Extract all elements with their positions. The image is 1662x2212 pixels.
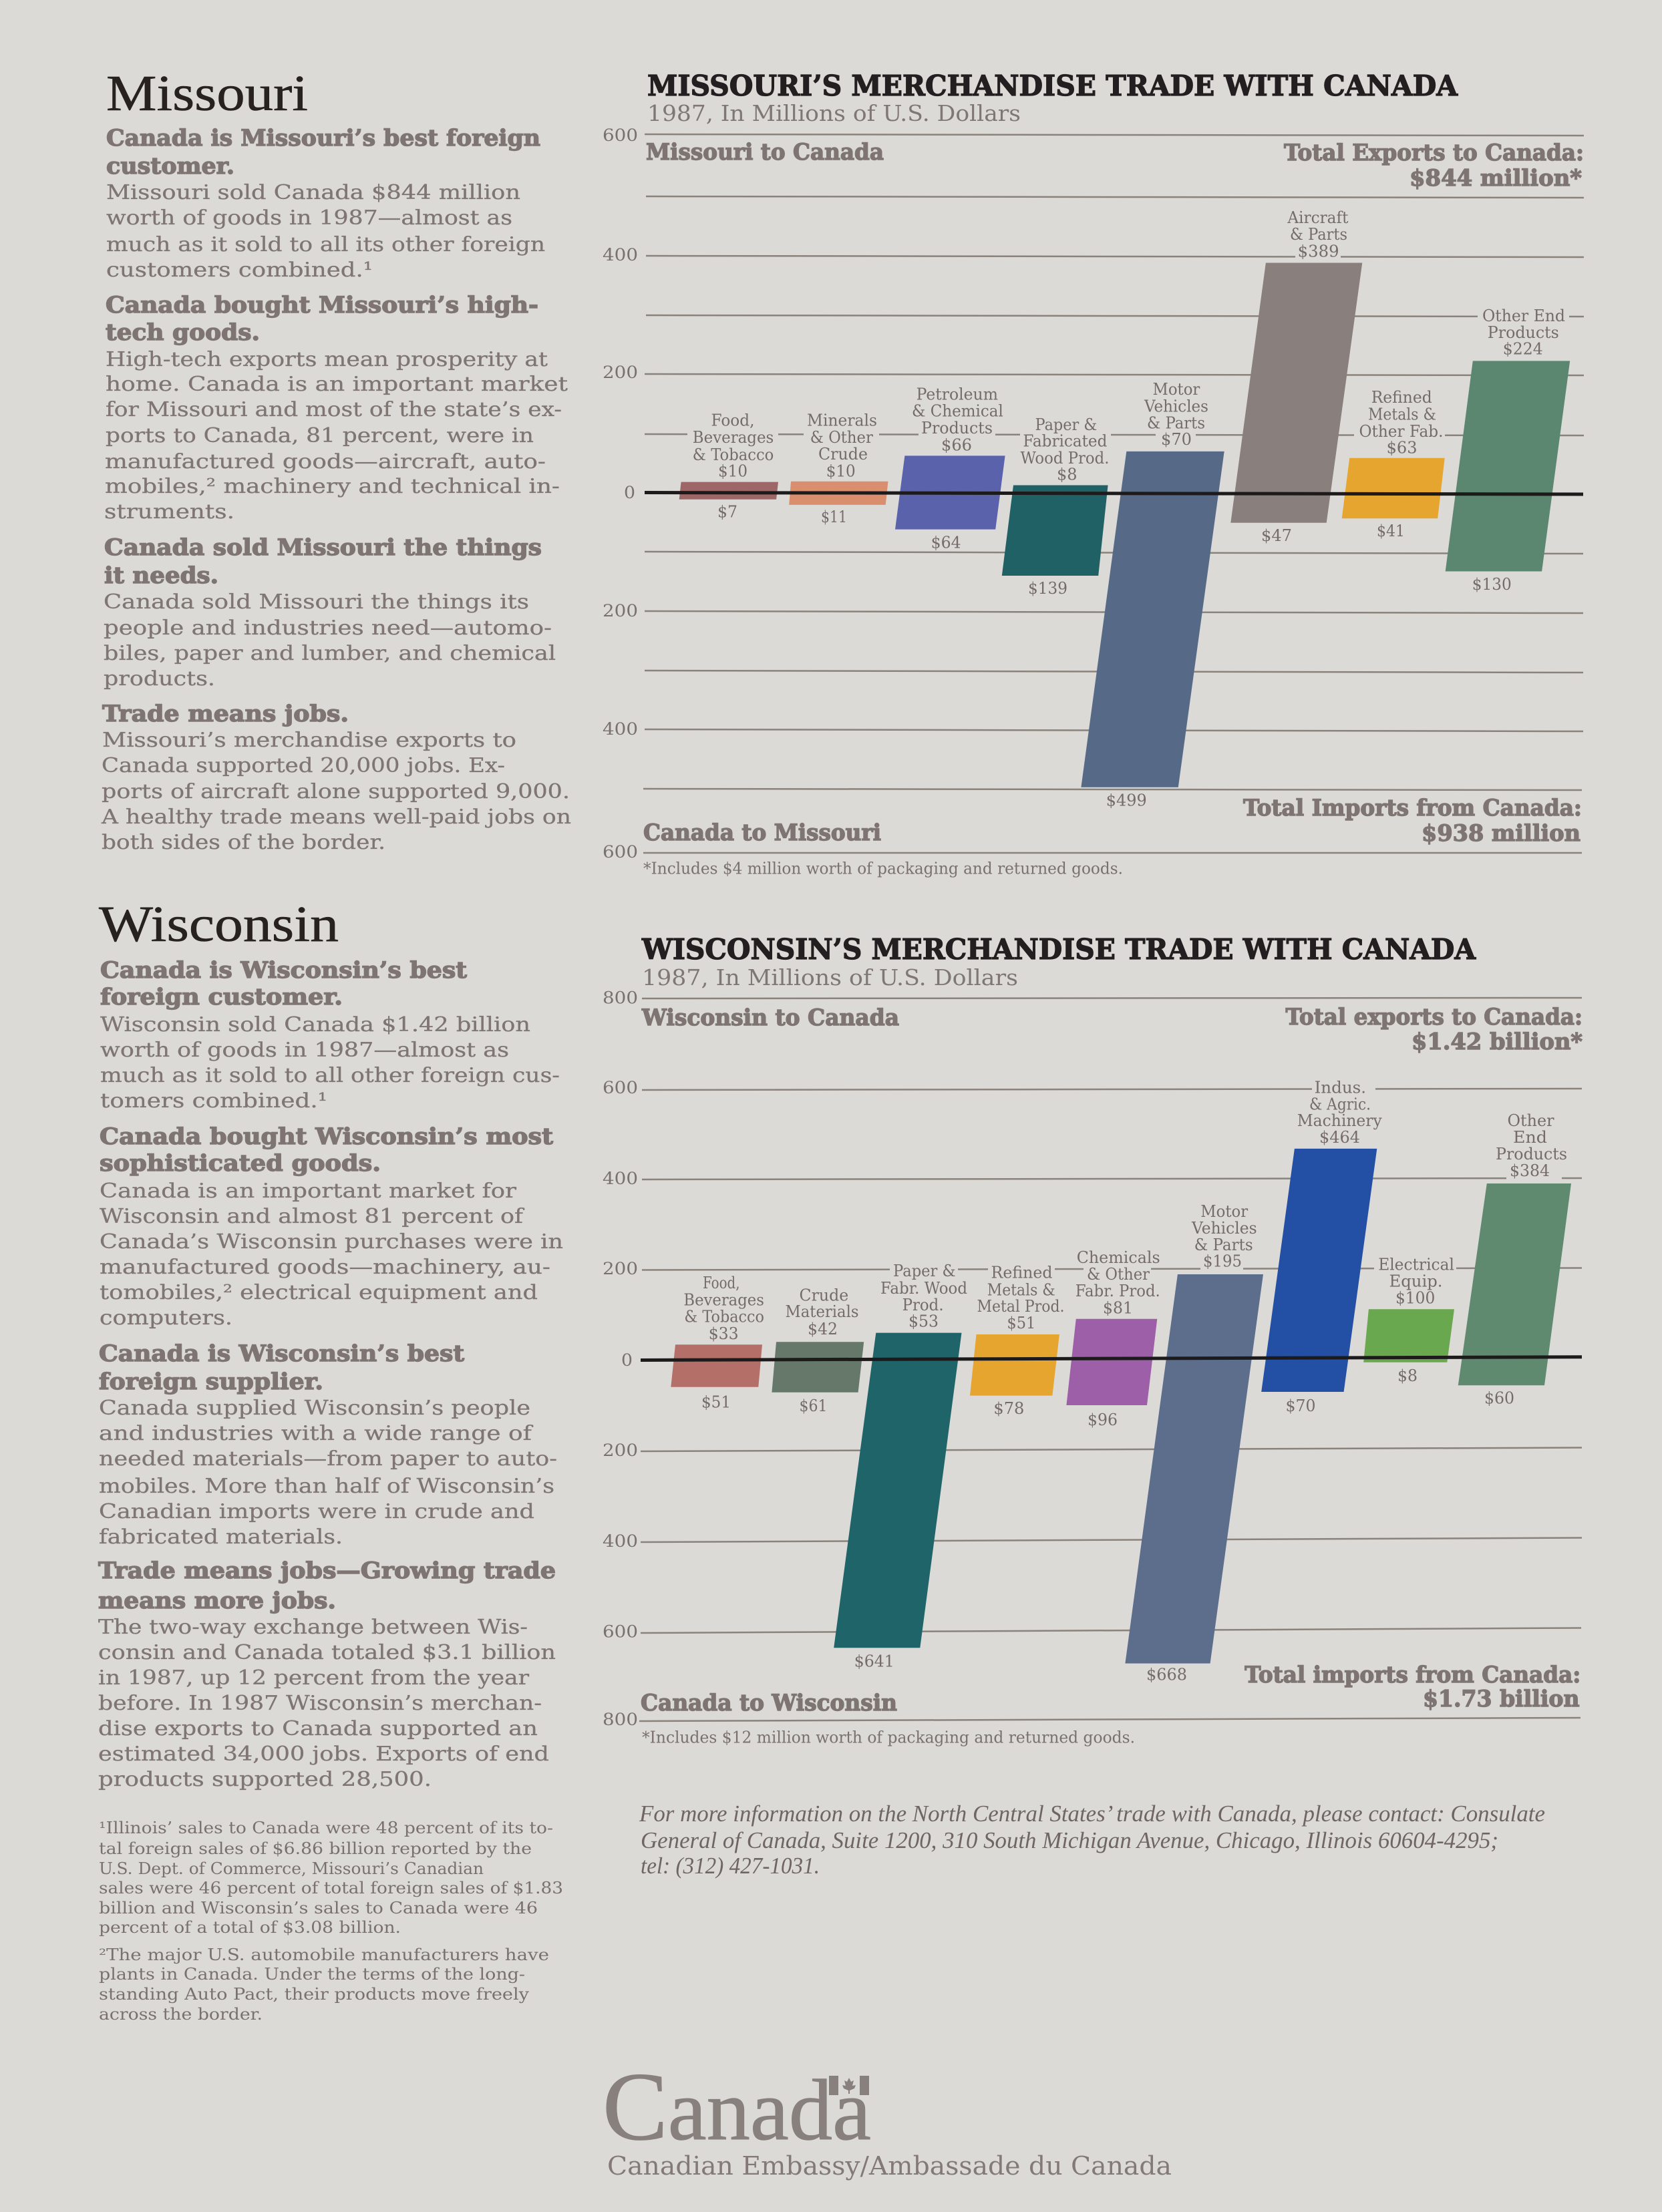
text block: best foreign customer: customer. — [106, 153, 234, 180]
import values: $96 — [1088, 1411, 1118, 1429]
label: food: Beverages — [683, 1291, 764, 1310]
label: paper: Prod. — [902, 1296, 944, 1314]
text block: growing trade means more jobs: consin and Canada totaled $3.1 billion — [98, 1641, 556, 1664]
totals and direction headings: Total Imports from Canada: — [1243, 795, 1582, 821]
label: paper: Fabr. Wood — [880, 1279, 967, 1298]
label: aircraft: $389 — [1298, 242, 1339, 260]
label: paper: $53 — [908, 1312, 939, 1331]
label: minerals: & Other — [810, 428, 873, 447]
bar: minerals and other crude — [789, 482, 888, 505]
label: electrical equipment: $100 — [1395, 1288, 1435, 1307]
totals and direction headings: Total exports to Canada: — [1285, 1004, 1583, 1031]
totals and direction headings: $1.73 billion — [1423, 1686, 1579, 1712]
text block: trade means jobs: both sides of the border. — [102, 831, 385, 854]
text block: footnotes: ¹Illinois’ sales to Canada were 48 percent of its to- — [99, 1819, 553, 1837]
totals and direction headings: $844 million* — [1409, 165, 1582, 192]
totals and direction headings — [641, 1004, 1583, 1716]
label: refined metals: Metal Prod. — [977, 1297, 1065, 1316]
text block: best foreign supplier: mobiles. More than half of Wisconsin’s — [99, 1475, 554, 1498]
label: petroleum: Products — [921, 419, 993, 437]
text block: growing trade means more jobs: in 1987, up 12 percent from the year — [98, 1666, 530, 1690]
text block: best foreign customer: tomers combined.¹ — [100, 1089, 327, 1113]
axis labels: 0 — [621, 1350, 633, 1370]
label: petroleum: $66 — [941, 435, 972, 454]
chart title: MISSOURI’S MERCHANDISE TRADE WITH CANADA — [647, 69, 1458, 102]
text block: best foreign customer: Canada is Missouri’s best foreign — [106, 125, 540, 152]
text block: things it needs: people and industries need—automo- — [104, 616, 552, 640]
text block: trade means jobs: Trade means jobs. — [102, 701, 349, 727]
text block: footnotes: percent of a total of $3.08 billion. — [99, 1918, 401, 1937]
label: chemicals — [1075, 1248, 1160, 1318]
text block: best foreign customer: customers combined.¹ — [106, 258, 373, 282]
panel: Wisconsin text column — [98, 896, 563, 2024]
label: electrical equipment: Equip. — [1389, 1272, 1443, 1290]
text block: things it needs: Canada sold Missouri the things — [104, 534, 542, 561]
label: chemicals: $81 — [1103, 1299, 1133, 1318]
text block: best foreign customer: much as it sold to all its other foreign — [106, 233, 545, 256]
label: food: Beverages — [693, 428, 774, 447]
text block: best foreign customer — [100, 957, 560, 1113]
axis labels: 800 — [603, 1710, 638, 1729]
label: paper: Wood Prod. — [1021, 449, 1109, 468]
axis labels: 400 — [603, 719, 638, 739]
heading: Missouri: Missouri — [106, 65, 308, 122]
text block: high-tech goods — [104, 292, 568, 524]
label: other end products: Products — [1488, 323, 1559, 342]
import values: $61 — [799, 1397, 827, 1415]
axis labels: 800 — [603, 988, 638, 1008]
import values: $139 — [1028, 579, 1067, 598]
label: other end products: Other End — [1482, 307, 1565, 325]
bar: food, beverages and tobacco — [671, 1344, 762, 1387]
bar: crude materials — [772, 1342, 864, 1393]
import values: $130 — [1472, 575, 1512, 594]
label: chemicals: & Other — [1087, 1265, 1150, 1284]
axis labels: 400 — [603, 245, 638, 264]
totals and direction headings: $938 million — [1422, 820, 1581, 847]
bar: electrical equipment — [1363, 1309, 1454, 1362]
bar: food, beverages and tobacco — [679, 482, 778, 500]
label: refined metals: $63 — [1387, 438, 1418, 457]
axis labels — [603, 988, 638, 1729]
import values: $51 — [701, 1393, 731, 1411]
text block: footnotes — [99, 1819, 563, 2024]
panel: Missouri trade chart — [603, 69, 1584, 878]
label: electrical equipment — [1378, 1256, 1454, 1307]
label: food: & Tobacco — [693, 445, 774, 464]
text block: high-tech goods: manufactured goods—aircraft, auto- — [105, 450, 546, 474]
heading: Wisconsin: Wisconsin — [99, 896, 339, 952]
text block: best foreign supplier: Canada is Wisconsin’s best — [99, 1340, 464, 1367]
text block: most sophisticated goods: Canada is an important market for — [100, 1179, 517, 1203]
text block: high-tech goods: tech goods. — [106, 319, 260, 346]
import values — [701, 1366, 1514, 1684]
text block: high-tech goods: High-tech exports mean prosperity at — [106, 348, 548, 371]
footnote: *Includes $12 million worth of packaging and returned goods. — [642, 1728, 1135, 1747]
label: petroleum: Petroleum — [917, 385, 998, 403]
text block: high-tech goods: struments. — [104, 500, 234, 524]
label: minerals — [807, 411, 877, 481]
bars — [671, 1149, 1571, 1664]
bar: petroleum and chemical products — [895, 455, 1005, 530]
text block: best foreign supplier: needed materials—from paper to auto- — [99, 1447, 557, 1471]
bar: motor vehicles and parts — [1125, 1274, 1263, 1664]
text block: footnotes: U.S. Dept. of Commerce, Missouri’s Canadian — [99, 1859, 484, 1878]
axis labels: 600 — [603, 1078, 638, 1097]
label: food: Food, — [711, 411, 755, 430]
axis labels: 0 — [624, 483, 635, 502]
label: machinery: $464 — [1319, 1128, 1360, 1147]
text block: most sophisticated goods: manufactured goods—machinery, au- — [100, 1256, 550, 1279]
totals and direction headings: Total Exports to Canada: — [1284, 140, 1584, 166]
text block: trade means jobs: Missouri’s merchandise exports to — [102, 729, 516, 752]
bar: other end products — [1446, 361, 1570, 572]
text block: most sophisticated goods: tomobiles,² electrical equipment and — [100, 1281, 538, 1304]
import values — [717, 503, 1512, 809]
text block: trade means jobs: ports of aircraft alone supported 9,000. — [102, 780, 570, 803]
bar: motor vehicles and parts — [1081, 451, 1224, 787]
text block: best foreign customer: foreign customer. — [100, 984, 343, 1010]
text block: best foreign supplier — [99, 1340, 557, 1549]
contact information: tel: (312) 427-1031. — [641, 1853, 820, 1879]
label: food: & Tobacco — [684, 1308, 764, 1326]
label: paper: $8 — [1057, 465, 1077, 484]
text block: best foreign supplier: and industries with a wide range of — [99, 1422, 533, 1445]
label: paper — [880, 1262, 967, 1331]
category labels — [683, 1078, 1567, 1343]
axis labels: 600 — [603, 126, 638, 145]
text block: best foreign supplier: Canadian imports were in crude and — [99, 1500, 534, 1523]
label: other end products: $384 — [1510, 1161, 1550, 1180]
import values: $499 — [1106, 791, 1147, 809]
totals and direction headings: Missouri to Canada — [646, 139, 884, 166]
zero line — [645, 493, 1583, 494]
label: food — [693, 411, 774, 481]
contact information — [639, 1801, 1545, 1879]
label: minerals: Crude — [818, 445, 868, 464]
text block: things it needs: it needs. — [104, 562, 218, 589]
import values: $60 — [1484, 1389, 1514, 1408]
bar: refined metals — [970, 1334, 1059, 1396]
import values: $11 — [821, 508, 847, 526]
import values: $41 — [1377, 522, 1405, 540]
text block: trade means jobs — [101, 701, 571, 854]
chart subtitle: 1987, In Millions of U.S. Dollars — [647, 100, 1021, 126]
text block: growing trade means more jobs: Trade means jobs—Growing trade — [98, 1557, 556, 1584]
text block: things it needs: biles, paper and lumber, and chemical — [104, 642, 556, 665]
axis labels — [603, 126, 638, 862]
contact information: For more information on the North Central States’ trade with Canada, please contact: Consulate — [639, 1801, 1545, 1827]
import values: $70 — [1285, 1397, 1316, 1415]
label: motor vehicles: Vehicles — [1191, 1219, 1257, 1238]
label: motor vehicles: & Parts — [1147, 414, 1205, 433]
text block: high-tech goods: for Missouri and most of the state’s ex- — [106, 398, 562, 421]
label: paper: Paper & — [1035, 415, 1097, 434]
category labels — [693, 208, 1565, 484]
text block: best foreign customer — [106, 125, 545, 282]
label: food — [683, 1274, 764, 1343]
logo: Canada wordmark: Canada — [603, 2052, 871, 2161]
label: crude materials: Materials — [786, 1302, 859, 1321]
label: motor vehicles — [1144, 380, 1208, 449]
text block: high-tech goods: ports to Canada, 81 percent, were in — [106, 424, 534, 447]
import values: $64 — [931, 533, 961, 552]
label: refined metals: $51 — [1007, 1314, 1035, 1332]
label: chemicals: Chemicals — [1077, 1248, 1160, 1267]
bar: chemicals — [1066, 1319, 1157, 1405]
text block: footnotes: across the border. — [99, 2005, 263, 2024]
totals and direction headings — [643, 139, 1584, 847]
import values: $641 — [854, 1652, 894, 1670]
text block: things it needs — [104, 534, 556, 691]
bar: paper and fabricated wood — [1002, 485, 1108, 576]
text block: growing trade means more jobs: The two-way exchange between Wis- — [98, 1616, 528, 1639]
text block: growing trade means more jobs: estimated 34,000 jobs. Exports of end — [98, 1742, 549, 1766]
text block: best foreign customer: Missouri sold Canada $844 million — [106, 181, 520, 204]
axis labels: 200 — [603, 363, 638, 382]
gridlines — [643, 134, 1584, 853]
label: machinery: & Agric. — [1309, 1095, 1371, 1113]
label: minerals: $10 — [826, 462, 856, 481]
text block: best foreign supplier: Canada supplied Wisconsin’s people — [99, 1397, 530, 1420]
import values: $668 — [1146, 1666, 1187, 1684]
text block: footnotes: tal foreign sales of $6.86 billion reported by the — [99, 1839, 532, 1858]
text block: footnotes: billion and Wisconsin’s sales to Canada were 46 — [99, 1899, 538, 1917]
text block: best foreign customer: much as it sold to all other foreign cus- — [100, 1064, 560, 1087]
axis labels: 200 — [603, 1259, 638, 1278]
panel: Missouri text column — [101, 65, 571, 854]
label: motor vehicles: & Parts — [1194, 1236, 1253, 1254]
label: crude materials — [786, 1286, 859, 1338]
text block: most sophisticated goods: Canada’s Wisconsin purchases were in — [100, 1230, 563, 1254]
import values: $47 — [1261, 526, 1292, 545]
bar: refined metals — [1342, 458, 1445, 518]
text block: high-tech goods: mobiles,² machinery and technical in- — [105, 475, 560, 498]
label: other end products — [1482, 307, 1565, 359]
axis labels: 400 — [603, 1169, 638, 1188]
label: petroleum: & Chemical — [912, 402, 1003, 421]
text block: most sophisticated goods — [100, 1123, 563, 1330]
totals and direction headings: $1.42 billion* — [1411, 1029, 1583, 1055]
chart title: WISCONSIN’S MERCHANDISE TRADE WITH CANADA — [641, 933, 1476, 966]
text block: best foreign customer: Wisconsin sold Canada $1.42 billion — [100, 1013, 530, 1037]
text block: growing trade means more jobs: before. In 1987 Wisconsin’s merchan- — [98, 1692, 542, 1715]
import values: $8 — [1397, 1366, 1418, 1385]
label: refined metals: Refined — [1371, 388, 1432, 407]
label: refined metals: Metals & — [1368, 405, 1436, 424]
chart subtitle: 1987, In Millions of U.S. Dollars — [642, 964, 1018, 990]
axis labels: 400 — [603, 1531, 638, 1551]
axis labels: 600 — [603, 842, 638, 862]
gridlines — [639, 998, 1582, 1721]
text block: trade means jobs: A healthy trade means well-paid jobs on — [101, 805, 571, 829]
text block: most sophisticated goods: computers. — [100, 1306, 232, 1330]
contact information: General of Canada, Suite 1200, 310 South Michigan Avenue, Chicago, Illinois 60604-4295; — [641, 1827, 1498, 1853]
text block: growing trade means more jobs: products supported 28,500. — [98, 1768, 432, 1791]
label: minerals: Minerals — [807, 411, 877, 430]
label: motor vehicles — [1191, 1202, 1257, 1271]
text block: high-tech goods: Canada bought Missouri’s high- — [106, 292, 538, 319]
label: motor vehicles: Motor — [1200, 1202, 1249, 1221]
label: paper — [1021, 415, 1109, 484]
label: petroleum — [912, 385, 1003, 454]
text block: most sophisticated goods: sophisticated goods. — [100, 1150, 381, 1177]
label: machinery: Indus. — [1315, 1078, 1366, 1097]
label: refined metals: Refined — [991, 1264, 1053, 1282]
label: aircraft — [1287, 208, 1349, 260]
totals and direction headings: Canada to Wisconsin — [641, 1690, 897, 1716]
text block: growing trade means more jobs: means more jobs. — [98, 1588, 336, 1614]
label: machinery — [1297, 1078, 1382, 1147]
label: food: $10 — [718, 462, 747, 481]
label: chemicals: Fabr. Prod. — [1075, 1282, 1160, 1300]
zero line — [641, 1357, 1582, 1360]
footnote: *Includes $4 million worth of packaging and returned goods. — [643, 859, 1123, 878]
text block: most sophisticated goods: Wisconsin and almost 81 percent of — [100, 1205, 524, 1228]
label: electrical equipment: Electrical — [1378, 1256, 1454, 1274]
icon: flag symbol — [829, 2076, 869, 2095]
axis labels: 600 — [603, 1622, 638, 1642]
label: crude materials: $42 — [808, 1320, 838, 1338]
text block: best foreign customer: worth of goods in 1987—almost as — [106, 206, 512, 230]
label: food: Food, — [703, 1274, 740, 1292]
label: refined metals: Metals & — [987, 1280, 1055, 1299]
panel: Wisconsin trade chart — [603, 933, 1583, 1747]
import values: $78 — [993, 1399, 1024, 1418]
text block: things it needs: products. — [104, 667, 215, 691]
label: other end products: Products — [1496, 1145, 1567, 1163]
label: crude materials: Crude — [799, 1286, 848, 1304]
label: food: $33 — [709, 1324, 739, 1343]
text block: best foreign supplier: foreign supplier. — [99, 1368, 323, 1395]
label: refined metals — [1359, 388, 1443, 457]
text block: best foreign supplier: fabricated materials. — [99, 1525, 343, 1549]
text: Canadian Embassy: Canadian Embassy/Ambassade du Canada — [607, 2151, 1172, 2181]
label: refined metals — [977, 1264, 1065, 1332]
axis labels: 200 — [603, 1441, 638, 1460]
label: machinery: Machinery — [1297, 1111, 1382, 1130]
text block: footnotes: plants in Canada. Under the terms of the long- — [99, 1965, 525, 1984]
bar: other end products — [1458, 1183, 1571, 1385]
text block: footnotes: ²The major U.S. automobile manufacturers have — [99, 1946, 549, 1964]
label: motor vehicles: Motor — [1153, 380, 1200, 399]
text block: footnotes: sales were 46 percent of total foreign sales of $1.83 — [99, 1879, 563, 1897]
text block: trade means jobs: Canada supported 20,000 jobs. Ex- — [102, 754, 505, 777]
axis labels: 200 — [603, 601, 638, 620]
label: paper: Fabricated — [1023, 432, 1107, 451]
label: refined metals: Other Fab. — [1359, 422, 1443, 441]
text block: growing trade means more jobs — [98, 1557, 556, 1791]
label: other end products: Other — [1507, 1111, 1554, 1130]
text block: things it needs: Canada sold Missouri the things its — [104, 590, 529, 614]
bar: industrial and agricultural machinery — [1261, 1149, 1377, 1392]
label: aircraft: Aircraft — [1287, 208, 1349, 227]
text block: best foreign customer: worth of goods in 1987—almost as — [100, 1039, 509, 1062]
totals and direction headings: Canada to Missouri — [643, 819, 881, 846]
bars — [679, 263, 1570, 787]
label: other end products: $224 — [1503, 340, 1543, 359]
totals and direction headings: Wisconsin to Canada — [641, 1004, 899, 1031]
totals and direction headings: Total imports from Canada: — [1244, 1662, 1581, 1688]
import values: $7 — [717, 503, 737, 522]
label: paper: Paper & — [893, 1262, 956, 1280]
text block: growing trade means more jobs: dise exports to Canada supported an — [98, 1717, 538, 1740]
label: aircraft: & Parts — [1290, 225, 1347, 244]
bar: aircraft and parts — [1230, 263, 1362, 523]
text block: best foreign customer: Canada is Wisconsin’s best — [100, 957, 467, 984]
label: other end products — [1496, 1111, 1567, 1180]
label: other end products: End — [1513, 1128, 1547, 1147]
label: motor vehicles: $70 — [1161, 430, 1192, 449]
label: motor vehicles: Vehicles — [1144, 397, 1208, 415]
text block: high-tech goods: home. Canada is an important market — [106, 373, 568, 396]
bar: paper and wood products — [834, 1333, 962, 1648]
text block: most sophisticated goods: Canada bought Wisconsin’s most — [100, 1123, 553, 1150]
text block: footnotes: standing Auto Pact, their products move freely — [99, 1985, 529, 2004]
label: motor vehicles: $195 — [1203, 1252, 1242, 1271]
